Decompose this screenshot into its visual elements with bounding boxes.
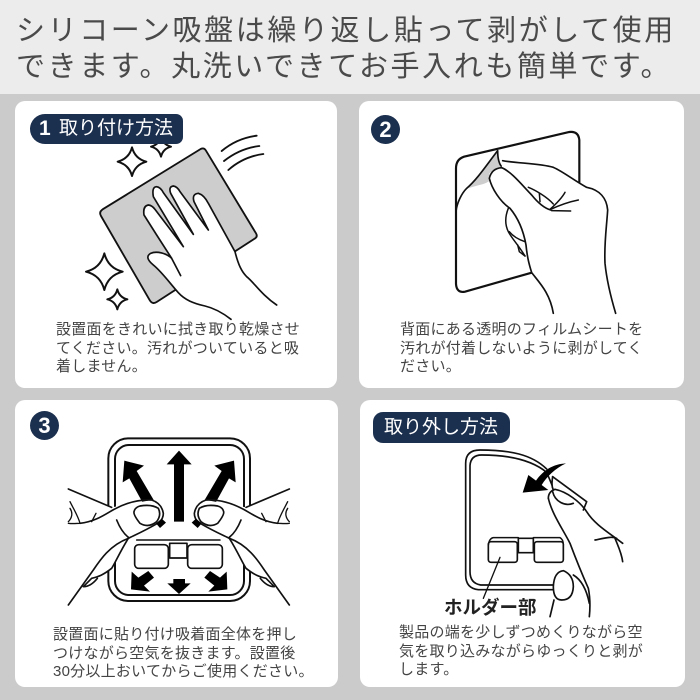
label: mounting method: 取り付け方法 bbox=[59, 118, 173, 139]
description text bbox=[400, 321, 643, 375]
mount frame bbox=[466, 450, 553, 590]
peel edge bbox=[456, 151, 503, 212]
description text: てください。汚れがついていると吸 bbox=[56, 340, 299, 357]
description text: 設置面に貼り付け吸着面全体を押し bbox=[53, 626, 297, 643]
cloth bbox=[100, 148, 257, 303]
arrows downward bbox=[131, 571, 227, 594]
description text: 30分以上おいてからご使用ください。 bbox=[53, 663, 314, 680]
left hand bbox=[68, 489, 166, 605]
description text: ださい。 bbox=[400, 358, 461, 375]
illustration: hand wiping surface bbox=[85, 134, 278, 320]
panel: step 1 bbox=[15, 101, 337, 388]
step number 2: 2 bbox=[379, 117, 392, 142]
label: mounting method: 1 bbox=[39, 117, 51, 140]
step number 3: 3 bbox=[38, 413, 51, 438]
description text: 着しません。 bbox=[56, 358, 147, 375]
illustration: peeling film bbox=[454, 130, 616, 314]
heading line 1: シリコーン吸盤は繰り返し貼って剥がして使用 bbox=[16, 15, 676, 47]
holder bbox=[135, 540, 222, 568]
thumb bbox=[489, 168, 553, 313]
heading line 2: できます。丸洗いできてお手入れも簡単です。 bbox=[16, 51, 672, 83]
description text: 設置面をきれいに拭き取り乾燥させ bbox=[56, 321, 300, 338]
label: mounting method bbox=[30, 114, 183, 144]
callout: holder part: ホルダー部 bbox=[444, 597, 537, 618]
back of hand outline bbox=[503, 161, 616, 313]
hand bbox=[144, 186, 277, 319]
pad outer and inner frame bbox=[108, 438, 250, 601]
label: removal method: 取り外し方法 bbox=[384, 417, 498, 438]
step number 3 bbox=[30, 411, 59, 440]
header band bbox=[0, 0, 700, 94]
sparkles bbox=[86, 137, 171, 309]
description text bbox=[56, 321, 300, 375]
description text: 汚れが付着しないように剥がしてく bbox=[400, 340, 643, 357]
illustration: pressing suction pad bbox=[68, 437, 290, 606]
hand bbox=[489, 161, 616, 313]
panel: step 2 bbox=[359, 101, 684, 388]
finger lines bbox=[506, 187, 578, 256]
description text bbox=[53, 626, 314, 680]
description text bbox=[399, 624, 643, 678]
illustration: peeling off mount bbox=[464, 449, 624, 618]
holder bbox=[488, 538, 563, 562]
description text: します。 bbox=[399, 661, 459, 678]
right hand bbox=[192, 489, 289, 605]
step number 2 bbox=[371, 115, 400, 144]
peeled corner bbox=[468, 151, 502, 188]
description text: 背面にある透明のフィルムシートを bbox=[400, 321, 643, 338]
hand bbox=[548, 477, 623, 617]
mount plate bbox=[456, 132, 579, 292]
leader line bbox=[483, 557, 500, 598]
label: removal method bbox=[373, 412, 510, 443]
description text: つけながら空気を抜きます。設置後 bbox=[53, 645, 296, 662]
description text: 気を取り込みながらゆっくりと剥が bbox=[399, 643, 643, 660]
arrows upward bbox=[123, 451, 236, 522]
motion lines bbox=[222, 136, 263, 170]
description text: 製品の端を少しずつめくりながら空 bbox=[399, 624, 643, 641]
curved arrow bbox=[523, 463, 566, 493]
panel: step 3 bbox=[15, 400, 338, 687]
panel: removal bbox=[360, 400, 685, 687]
